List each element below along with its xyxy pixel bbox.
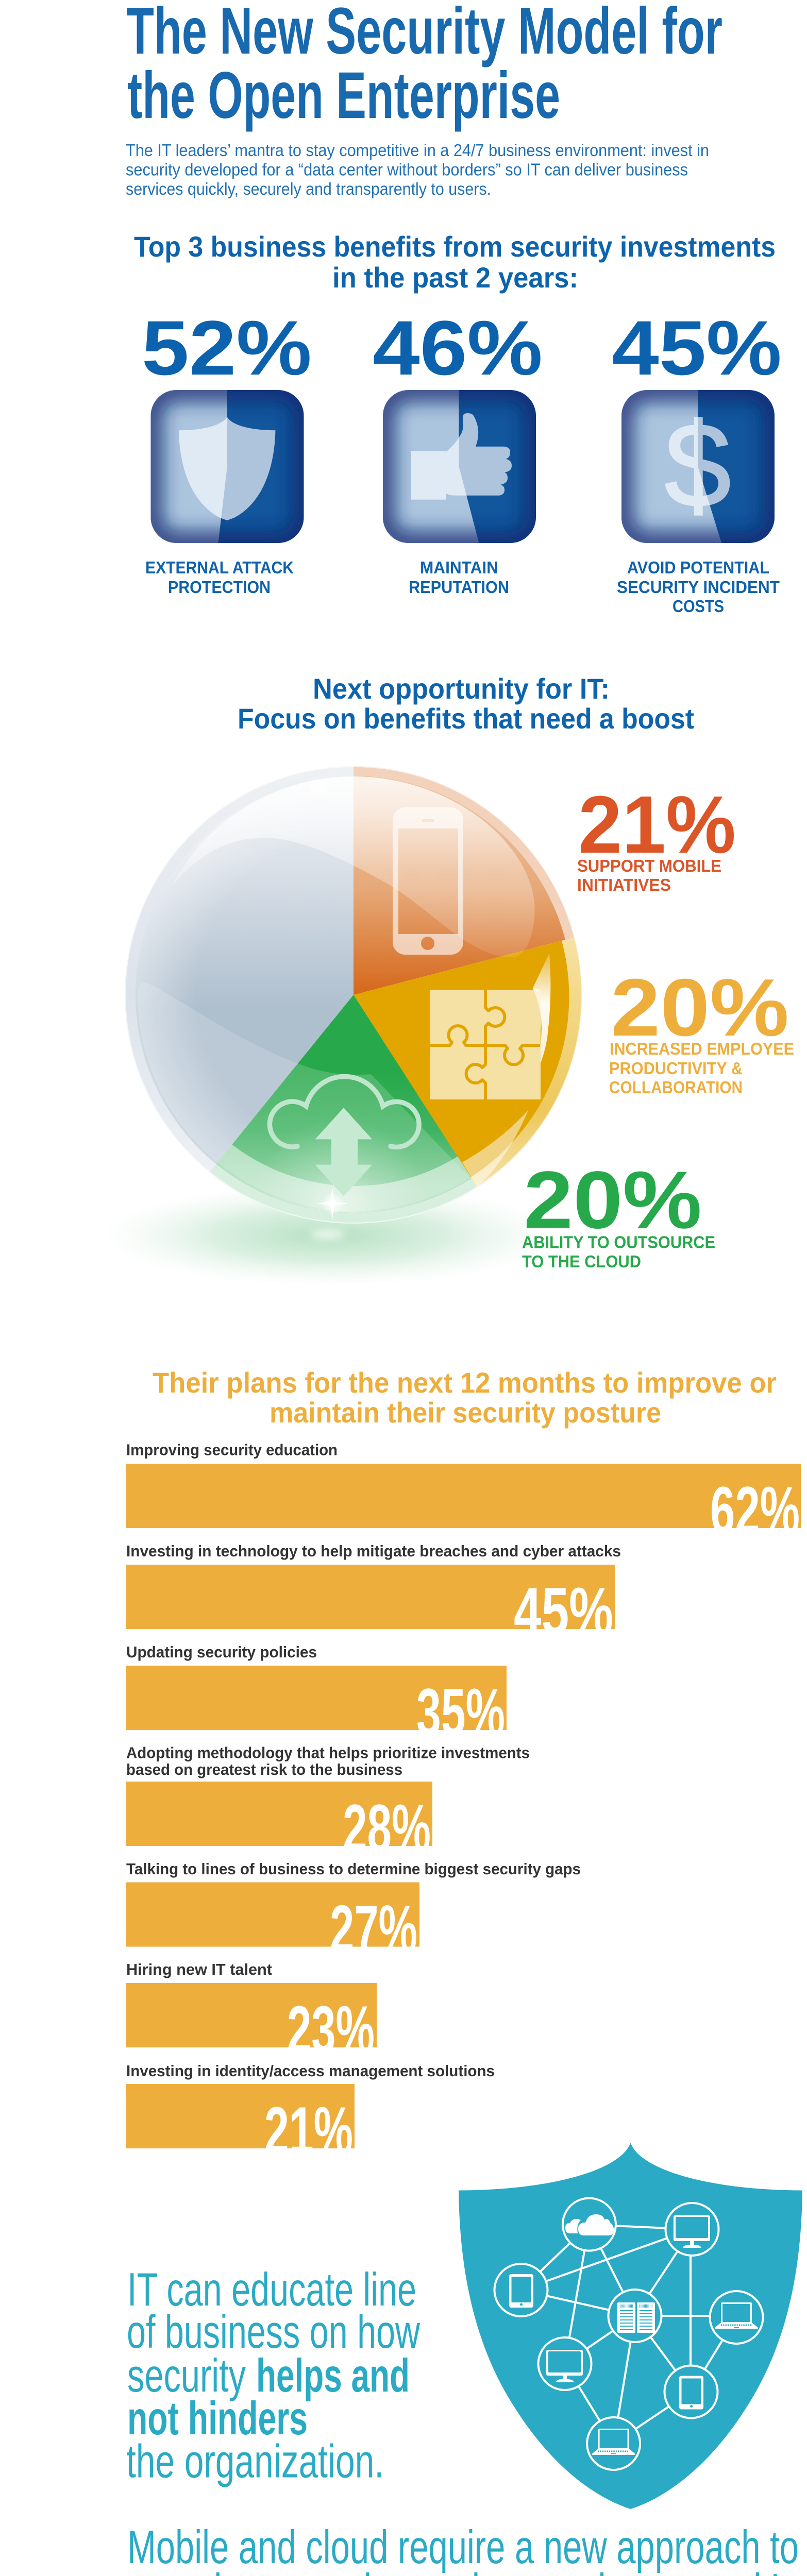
label: PROTECTION: [168, 578, 271, 597]
bar: updating security policies 35%: Updating security policies: [126, 1643, 317, 1661]
panel: benefit maintain reputation: [374, 320, 541, 594]
callout: 20% outsource to the cloud: 20%: [524, 1155, 702, 1246]
bar: identity and access management 21%: Investing in identity/access management solutions: [126, 2062, 495, 2080]
label: [617, 558, 780, 616]
node: laptop right: [710, 2291, 763, 2344]
callout: 20% outsource to the cloud: ABILITY TO OUTSOURCE: [522, 1232, 715, 1252]
icon: shield tile: [150, 390, 304, 543]
statement: IT can educate: the organization.: [126, 2436, 384, 2487]
icon: thumbs up tile: [383, 390, 536, 543]
stat: 52%: 52%: [142, 304, 312, 391]
callout: 21% support mobile initiatives: 21%: [578, 779, 736, 870]
label: [145, 558, 294, 597]
label: [409, 558, 509, 597]
heading: plans for next 12 months: [153, 1366, 777, 1429]
heading: top 3 business benefits: [134, 230, 776, 294]
label: REPUTATION: [409, 578, 509, 597]
panel: benefit external attack protection: [144, 320, 310, 594]
intro paragraph: [126, 141, 709, 198]
node: tablet: [495, 2264, 547, 2316]
bar: adopting methodology 28%: Adopting methodology that helps prioritize investments: [126, 1743, 530, 1762]
title: the Open Enterprise: [127, 59, 560, 132]
callout: 20% increased employee productivity: INCREASED EMPLOYEE: [610, 1039, 794, 1058]
heading: next opportunity: Next opportunity for IT:: [313, 672, 610, 705]
bar: hiring new IT talent 23%: [126, 1960, 377, 2067]
heading: next opportunity: Focus on benefits that need a boost: [238, 702, 694, 735]
statement: IT can educate: not hinders: [127, 2393, 308, 2445]
label: AVOID POTENTIAL: [627, 558, 769, 577]
icon: dollar tile: $: [664, 399, 731, 532]
node: monitor: [666, 2203, 718, 2256]
bar: investing in technology 45%: [126, 1542, 621, 1649]
callout: 21% support mobile initiatives: SUPPORT MOBILE: [577, 856, 721, 875]
statement: IT can educate: security: [127, 2350, 246, 2402]
statement: IT can educate: [126, 2264, 420, 2487]
callout: 21% support mobile initiatives: INITIATIVES: [577, 875, 671, 894]
statement: IT can educate: of business on how: [127, 2306, 420, 2358]
slice: productivity 20%: [354, 941, 569, 1178]
bar: hiring new IT talent 23%: Hiring new IT talent: [126, 1960, 272, 1978]
stat: 46%: 46%: [373, 304, 543, 391]
node: tablet lower: [665, 2366, 717, 2418]
slice: mobile 21%: [354, 776, 565, 995]
stat: 45%: 45%: [612, 304, 782, 391]
icon: puzzle: [430, 988, 542, 1099]
bar: adopting methodology 28%: based on greatest risk to the business: [126, 1760, 402, 1778]
network shield: [459, 2143, 802, 2509]
title: [126, 0, 722, 132]
callout: 20% increased employee productivity: [609, 962, 794, 1097]
slice: gray remainder: [136, 777, 354, 1164]
icon: smartphone: [393, 807, 463, 955]
icon: dollar tile: $: [664, 399, 731, 532]
node: monitor lower: [538, 2337, 592, 2390]
label: MAINTAIN: [420, 558, 498, 577]
statement: IT can educate: helps and: [256, 2350, 410, 2402]
label: SECURITY INCIDENT: [617, 578, 780, 597]
heading: plans for next 12 months: maintain their security posture: [270, 1396, 661, 1429]
callout: 20% increased employee productivity: 20%: [611, 962, 789, 1053]
slice: cloud 20%: [216, 995, 472, 1213]
heading: next opportunity: [238, 672, 694, 735]
bar: improving security education 62%: Improving security education: [126, 1440, 338, 1459]
callout: 20% outsource to the cloud: TO THE CLOUD: [522, 1252, 641, 1271]
bar: investing in technology 45%: Investing in technology to help mitigate breaches and cyber attacks: [126, 1542, 621, 1560]
callout: 20% increased employee productivity: COLLABORATION: [609, 1078, 743, 1097]
statement: IT can educate: IT can educate line: [127, 2264, 416, 2316]
sphere glass rim: [125, 766, 582, 1224]
heading: plans for next 12 months: Their plans for the next 12 months to improve or: [153, 1366, 777, 1399]
glass highlights: [125, 766, 582, 1224]
sphere ground shadow: [100, 1185, 559, 1286]
intro paragraph: The IT leaders’ mantra to stay competitive in a 24/7 business environment: invest in: [126, 141, 709, 160]
sphere pie chart: [100, 766, 582, 1298]
bar: updating security policies 35%: [126, 1643, 507, 1750]
label: COSTS: [672, 597, 724, 616]
heading: top 3 business benefits: in the past 2 years:: [332, 261, 578, 294]
bar: talking to lines of business 27%: Talking to lines of business to determine biggest security gaps: [126, 1860, 581, 1878]
bar: talking to lines of business 27%: [126, 1860, 581, 1966]
icon: cloud with up and down arrow: [270, 1076, 419, 1196]
bar: identity and access management 21%: [126, 2062, 495, 2168]
bar: adopting methodology 28%: [126, 1743, 530, 1866]
panel: benefit avoid security incident costs: [613, 320, 780, 612]
callout: 20% increased employee productivity: PRODUCTIVITY &: [609, 1059, 743, 1078]
bar chart: security plans: [126, 1440, 801, 2168]
callout: 20% outsource to the cloud: [522, 1155, 715, 1271]
icon: dollar tile: [621, 390, 775, 543]
label: EXTERNAL ATTACK: [145, 558, 294, 577]
node: cloud: [563, 2198, 616, 2251]
intro paragraph: services quickly, securely and transparently to users.: [126, 179, 491, 198]
intro paragraph: security developed for a “data center without borders” so IT can deliver business: [126, 160, 688, 179]
bar: improving security education 62%: [126, 1440, 801, 1548]
node: server: [608, 2290, 662, 2342]
node: laptop bottom: [587, 2417, 640, 2470]
